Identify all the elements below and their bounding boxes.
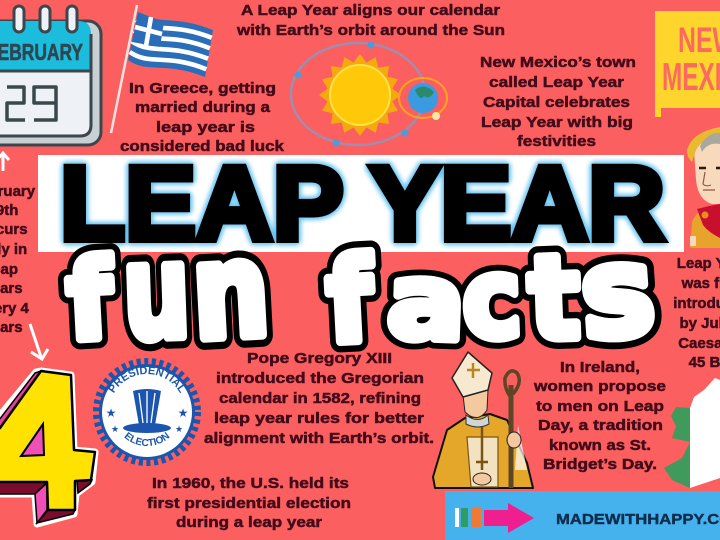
title: Fun Facts: t [526, 230, 582, 367]
text: Ireland fact: to men on Leap [536, 398, 664, 415]
icon: Julius Caesar [687, 127, 720, 248]
text: Ireland fact: women propose [533, 378, 666, 395]
text: orbit fact: A Leap Year aligns our calendar [241, 2, 500, 19]
text: Greece fact: considered bad luck [120, 138, 285, 155]
text: New Mexico fact: New Mexico’s town [480, 54, 636, 71]
arrow: up to calendar [0, 153, 9, 171]
text: Ireland fact: In Ireland, [560, 359, 640, 376]
text: Pope Gregory fact [204, 350, 434, 447]
title: Fun Facts: u [121, 216, 192, 369]
icon: presidential election seal: ELECTION [124, 432, 170, 446]
text: New Mexico fact [480, 54, 636, 150]
arrow: pink pointer [484, 503, 534, 533]
icon: presidential election seal: ★ [178, 406, 188, 420]
title: Fun Facts: a [385, 240, 468, 365]
title: Fun Facts: n [189, 214, 273, 370]
icon: number four [0, 371, 95, 524]
title: Fun Facts: s [576, 219, 659, 368]
text: Pope Gregory fact: introduced the Gregorian [216, 370, 424, 387]
icon: Greek flag [111, 5, 213, 133]
text: Greece fact [120, 80, 285, 155]
icon: Pope Gregory [433, 352, 533, 488]
title: Fun Facts: u [121, 216, 192, 369]
text: Pope Gregory fact: Pope Gregory XIII [247, 350, 392, 367]
text: Greece fact: married during a [135, 99, 271, 116]
text: Greece fact: In Greece, getting [129, 80, 276, 97]
text: 1960 election fact: first presidential election [147, 495, 351, 512]
title: Fun Facts: c [460, 233, 524, 364]
text: Ireland fact [533, 359, 666, 473]
text: 1960 election fact [147, 475, 351, 531]
title: Fun Facts: f [64, 236, 117, 366]
text: Greece fact: leap year is [156, 119, 255, 136]
text: New Mexico fact: Leap Year with big [481, 114, 633, 131]
icon: colour stripes [455, 508, 481, 527]
icon: presidential election seal: ★ [111, 425, 119, 435]
title: Fun Facts: f [323, 233, 378, 370]
text: Pope Gregory fact: leap year rules for better [214, 410, 424, 427]
text: New Mexico fact: Capital celebrates [483, 94, 630, 111]
text: Pope Gregory fact: calendar in 1582, refining [219, 390, 421, 407]
title: LEAP YEAR: LEAP YEAR [60, 146, 665, 262]
title: Fun Facts: t [526, 230, 582, 367]
title: Fun Facts: f [323, 233, 378, 370]
text: orbit fact [236, 2, 505, 39]
title: Fun Facts: c [460, 233, 524, 364]
text: New Mexico fact: called Leap Year [489, 74, 624, 91]
text: Ireland fact: Bridget’s Day. [543, 456, 657, 473]
title: Fun Facts: n [189, 214, 273, 370]
text: 1960 election fact: during a leap year [176, 514, 322, 531]
icon: Ireland map [664, 378, 720, 488]
title: Fun Facts [64, 214, 659, 370]
icon: New Mexico state shape [655, 11, 720, 117]
text: February 29 fact [0, 183, 36, 336]
title: LEAP YEAR: LEAP YEAR [60, 146, 665, 262]
arrow: down to number four [30, 324, 48, 359]
title: Fun Facts: f [64, 236, 117, 366]
title: Fun Facts: s [576, 219, 659, 368]
text: Ireland fact: Day, a tradition [538, 417, 663, 434]
text: 1960 election fact: In 1960, the U.S. held its [152, 475, 349, 492]
text: Pope Gregory fact: alignment with Earth’s orbit. [204, 430, 434, 447]
panel: title background [38, 155, 684, 252]
text: Julius Caesar fact [673, 255, 720, 371]
icon: sun and earth orbit [291, 42, 447, 146]
icon: presidential election seal: ★ [106, 406, 116, 420]
text: orbit fact: with Earth’s orbit around the Sun [236, 22, 505, 39]
text: New Mexico fact: festivities [517, 133, 596, 150]
icon: presidential election seal [93, 358, 201, 466]
title: Fun Facts: a [385, 240, 468, 365]
icon: presidential election seal: PRESIDENTIAL [108, 367, 184, 394]
icon: presidential election seal: ★ [175, 425, 183, 435]
text: Ireland fact: known as St. [549, 437, 651, 454]
panel: footer banner [445, 491, 720, 540]
icon: February 29 calendar [0, 6, 101, 145]
